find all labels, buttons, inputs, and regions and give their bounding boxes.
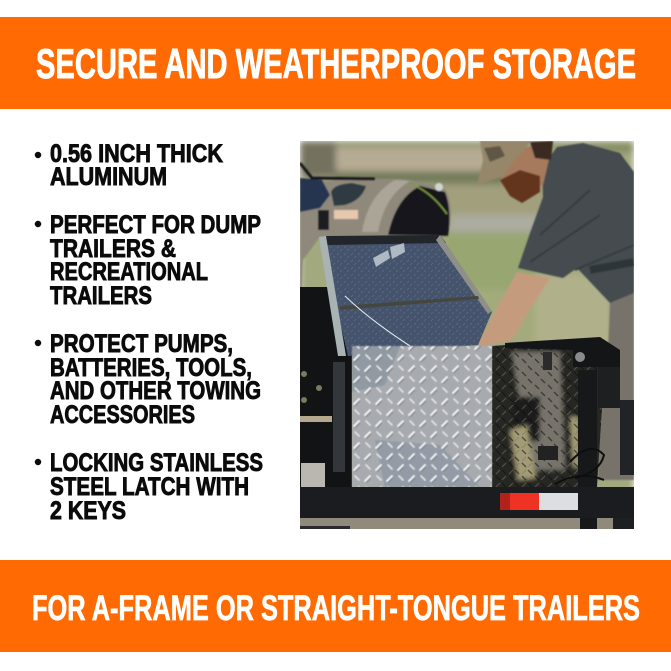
bullet: protected gear: PROTECT PUMPS,	[50, 330, 233, 358]
arm	[476, 272, 550, 347]
tongue jack	[505, 337, 634, 490]
header banner	[0, 17, 671, 109]
bullet: aluminum thickness: ALUMINUM	[50, 163, 167, 191]
ATV	[300, 162, 452, 287]
footer banner	[0, 560, 671, 652]
bullet: protected gear: ACCESSORIES	[50, 401, 195, 429]
bullet: protected gear	[35, 330, 261, 429]
photo background: blurred field	[300, 141, 634, 487]
bullet: latch: STEEL LATCH WITH	[50, 473, 249, 501]
bullet: latch: LOCKING STAINLESS	[50, 449, 263, 477]
bullet: trailer fit: RECREATIONAL	[50, 258, 208, 286]
cap	[477, 141, 532, 185]
bullet: aluminum thickness	[35, 140, 223, 191]
bullet: trailer fit: PERFECT FOR DUMP	[50, 211, 261, 239]
toolbox side, dark reflective	[492, 345, 602, 487]
bullet: trailer fit: TRAILERS &	[50, 235, 176, 263]
man	[476, 141, 634, 480]
bullet: protected gear: AND OTHER TOWING	[50, 377, 261, 405]
bullet: latch	[35, 449, 263, 525]
ground below rail	[300, 518, 634, 529]
toolbox front, diamond plate	[352, 346, 492, 487]
bullet: aluminum thickness: 0.56 INCH THICK	[50, 140, 223, 168]
shirt	[518, 143, 634, 303]
trousers	[598, 290, 634, 480]
toolbox lid	[319, 235, 492, 356]
bullet: trailer fit	[35, 211, 261, 310]
beard	[500, 170, 540, 203]
trailer rail	[300, 487, 634, 518]
feature bullet list	[35, 140, 263, 525]
bullet: protected gear: BATTERIES, TOOLS,	[50, 354, 252, 382]
photo: man opening diamond plate toolbox on trailer	[300, 141, 634, 529]
reflector	[500, 493, 578, 510]
bullet: latch: 2 KEYS	[50, 497, 126, 525]
bullet: trailer fit: TRAILERS	[50, 282, 152, 310]
neck and face	[500, 146, 550, 186]
trailer frame left	[300, 287, 352, 487]
